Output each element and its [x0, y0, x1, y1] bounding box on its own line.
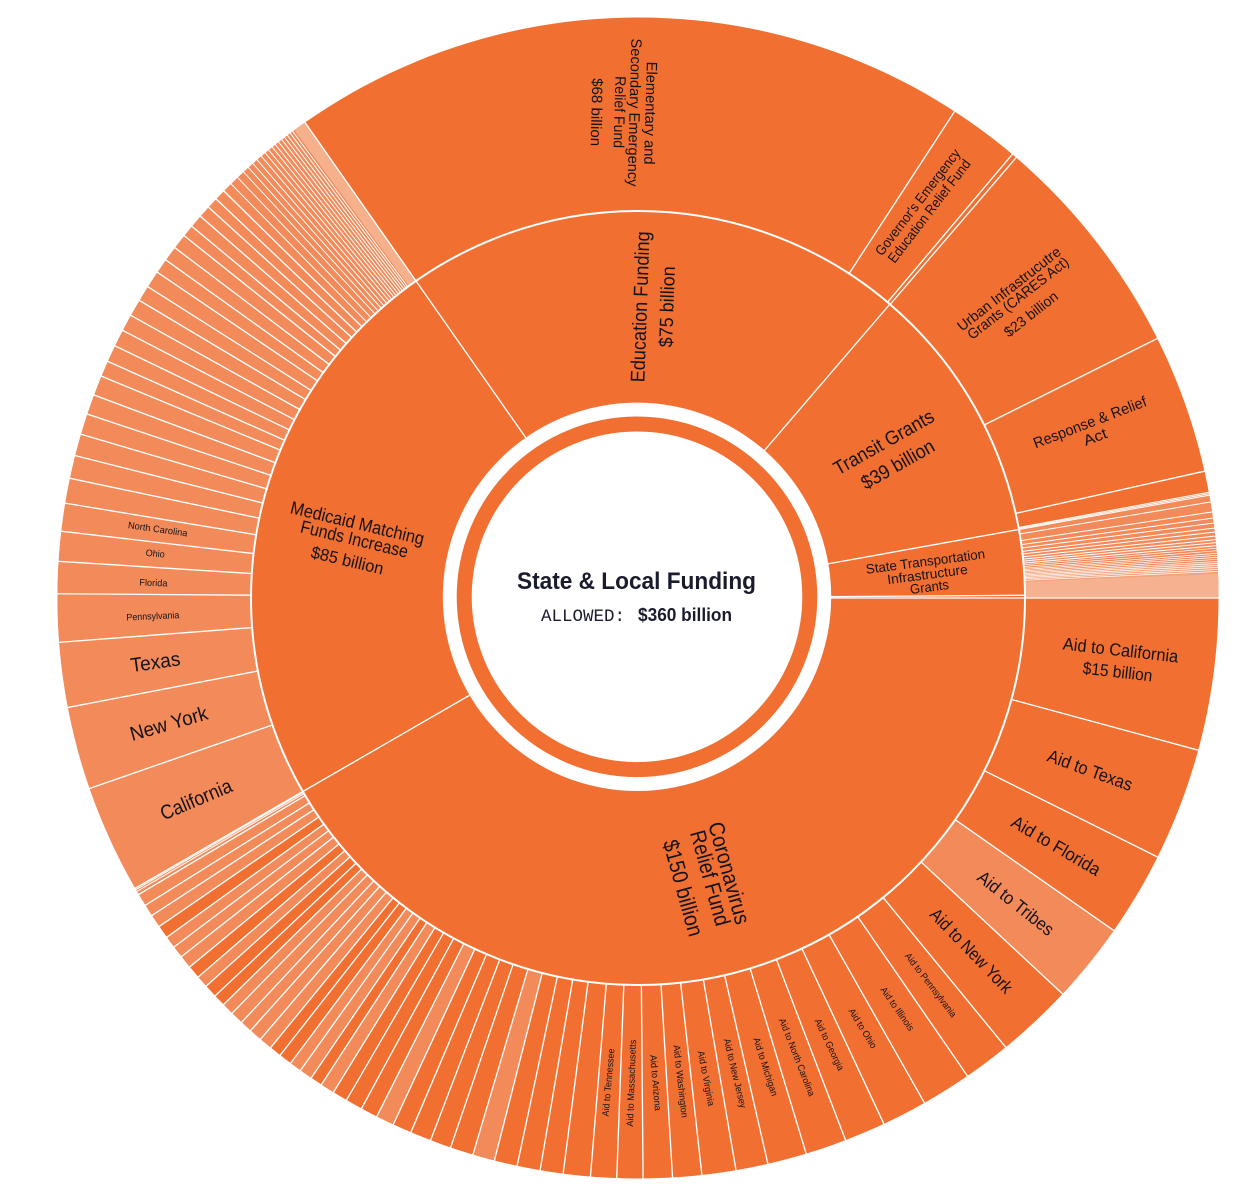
outer ring hatching: smallest medicaid slices: [231, 131, 408, 322]
label: aid to california: $15 billion: [1082, 659, 1153, 685]
label: large state aid slices: Aid to Tribes: [974, 867, 1058, 940]
label: large state aid slices: Aid to Florida: [1008, 812, 1105, 880]
label: large state aid slices: Aid to Texas: [1045, 746, 1135, 795]
label: coronavirus relief fund: Relief Fund: [685, 827, 735, 929]
label: large state aid slices: [926, 746, 1135, 998]
label: state transportation infrastructure grants: [865, 546, 986, 597]
label: governor's emergency education relief fund: Education Relief Fund: [884, 156, 974, 266]
label: medicaid matching funds increase: [288, 497, 426, 579]
outer ring slivers at end of coronavirus relief fund: [136, 792, 304, 892]
label: small state aid slices: Aid to North Carolina: [776, 1017, 817, 1099]
label: governor's emergency education relief fund: Governor's Emergency: [872, 146, 963, 258]
divider arc between middle and outer rings: [251, 211, 1025, 985]
label: small state aid slices: Aid to Michigan: [750, 1036, 780, 1098]
label: urban infrastructure grants: Urban Infrastrucutre: [955, 244, 1065, 335]
middle ring separators: [303, 281, 1025, 792]
label: medicaid state slices: Ohio: [145, 548, 165, 561]
label: small state aid slices: Aid to Illinois: [878, 985, 916, 1033]
centre title: $360 billion: [638, 605, 732, 625]
label: coronavirus relief fund: [658, 819, 755, 939]
centre orange ring: [457, 416, 817, 777]
label: medicaid state slices: [126, 520, 236, 825]
label: transit grants: Transit Grants: [830, 406, 938, 480]
label: state transportation infrastructure grants: Infrastructure: [886, 562, 969, 587]
centre white disc: [472, 432, 802, 762]
label: small state aid slices: Aid to New Jersey: [721, 1038, 748, 1109]
label: small state aid slices: Aid to Virginia: [695, 1050, 716, 1108]
label: state transportation infrastructure grants: State Transportation: [865, 546, 986, 577]
label: education funding: Education Funding: [627, 231, 655, 383]
label: medicaid state slices: Florida: [139, 578, 168, 590]
centre title: [517, 568, 756, 627]
label: coronavirus relief fund: Coronavirus: [703, 819, 755, 927]
label: transit grants: $39 billion: [857, 435, 939, 494]
label: medicaid state slices: North Carolina: [127, 520, 189, 540]
label: urban infrastructure grants: Grants (CARES Act): [965, 254, 1072, 343]
label: medicaid state slices: Texas: [129, 648, 182, 677]
outer ring hatching: finest state transportation slices: [1024, 548, 1218, 580]
label: urban infrastructure grants: $23 billion: [1001, 289, 1062, 341]
label: small state aid slices: Aid to Tennessee: [601, 1048, 617, 1117]
centre title: State & Local Funding: [517, 568, 756, 595]
label: small state aid slices: Aid to Massachusetts: [625, 1039, 639, 1127]
label: elementary and secondary emergency relief fund: $68 billion: [587, 78, 605, 146]
label: small state aid slices: Aid to Arizona: [647, 1054, 663, 1112]
label: response and relief act: Response & Relief: [1031, 393, 1150, 452]
label: elementary and secondary emergency relief fund: [587, 38, 660, 187]
label: medicaid state slices: Pennsylvania: [126, 610, 180, 623]
centre title: ALLOWED:: [541, 607, 625, 627]
label: small state aid slices: Aid to Ohio: [846, 1007, 879, 1051]
label: small state aid slices: Aid to Georgia: [812, 1017, 846, 1073]
label: small state aid slices: Aid to Washington: [670, 1045, 690, 1118]
outer ring separators: medicaid matching funds: [57, 191, 362, 889]
label: aid to california: [1062, 634, 1180, 685]
white gap around centre ring: [443, 403, 831, 791]
label: education funding: [627, 231, 680, 383]
label: education funding: $75 billion: [656, 266, 680, 348]
label: coronavirus relief fund: $150 billion: [658, 837, 709, 939]
label: response and relief act: Act: [1081, 425, 1110, 450]
label: medicaid matching funds increase: Medicaid Matching: [288, 497, 426, 549]
outer ring separators: coronavirus relief fund: [138, 598, 1219, 1179]
label: medicaid state slices: California: [157, 775, 236, 825]
outer ring separators: education and transit: [305, 111, 1205, 513]
label: large state aid slices: Aid to New York: [926, 904, 1017, 998]
label: medicaid matching funds increase: Funds Increase: [299, 517, 410, 562]
label: medicaid state slices: New York: [128, 702, 211, 746]
label: elementary and secondary emergency relief fund: Elementary and: [640, 61, 660, 165]
label: medicaid matching funds increase: $85 billion: [309, 543, 385, 579]
label: elementary and secondary emergency relief fund: Relief Fund: [610, 76, 628, 148]
label: small state aid slices: [601, 951, 959, 1127]
label: elementary and secondary emergency relief fund: Secondary Emergency: [624, 38, 644, 187]
label: aid to california: Aid to California: [1062, 634, 1180, 667]
outer ring hatching: state transportation slices: [1019, 492, 1217, 563]
label: small state aid slices: Aid to Pennsylvania: [902, 951, 959, 1020]
label: state transportation infrastructure grants: Grants: [909, 577, 950, 597]
